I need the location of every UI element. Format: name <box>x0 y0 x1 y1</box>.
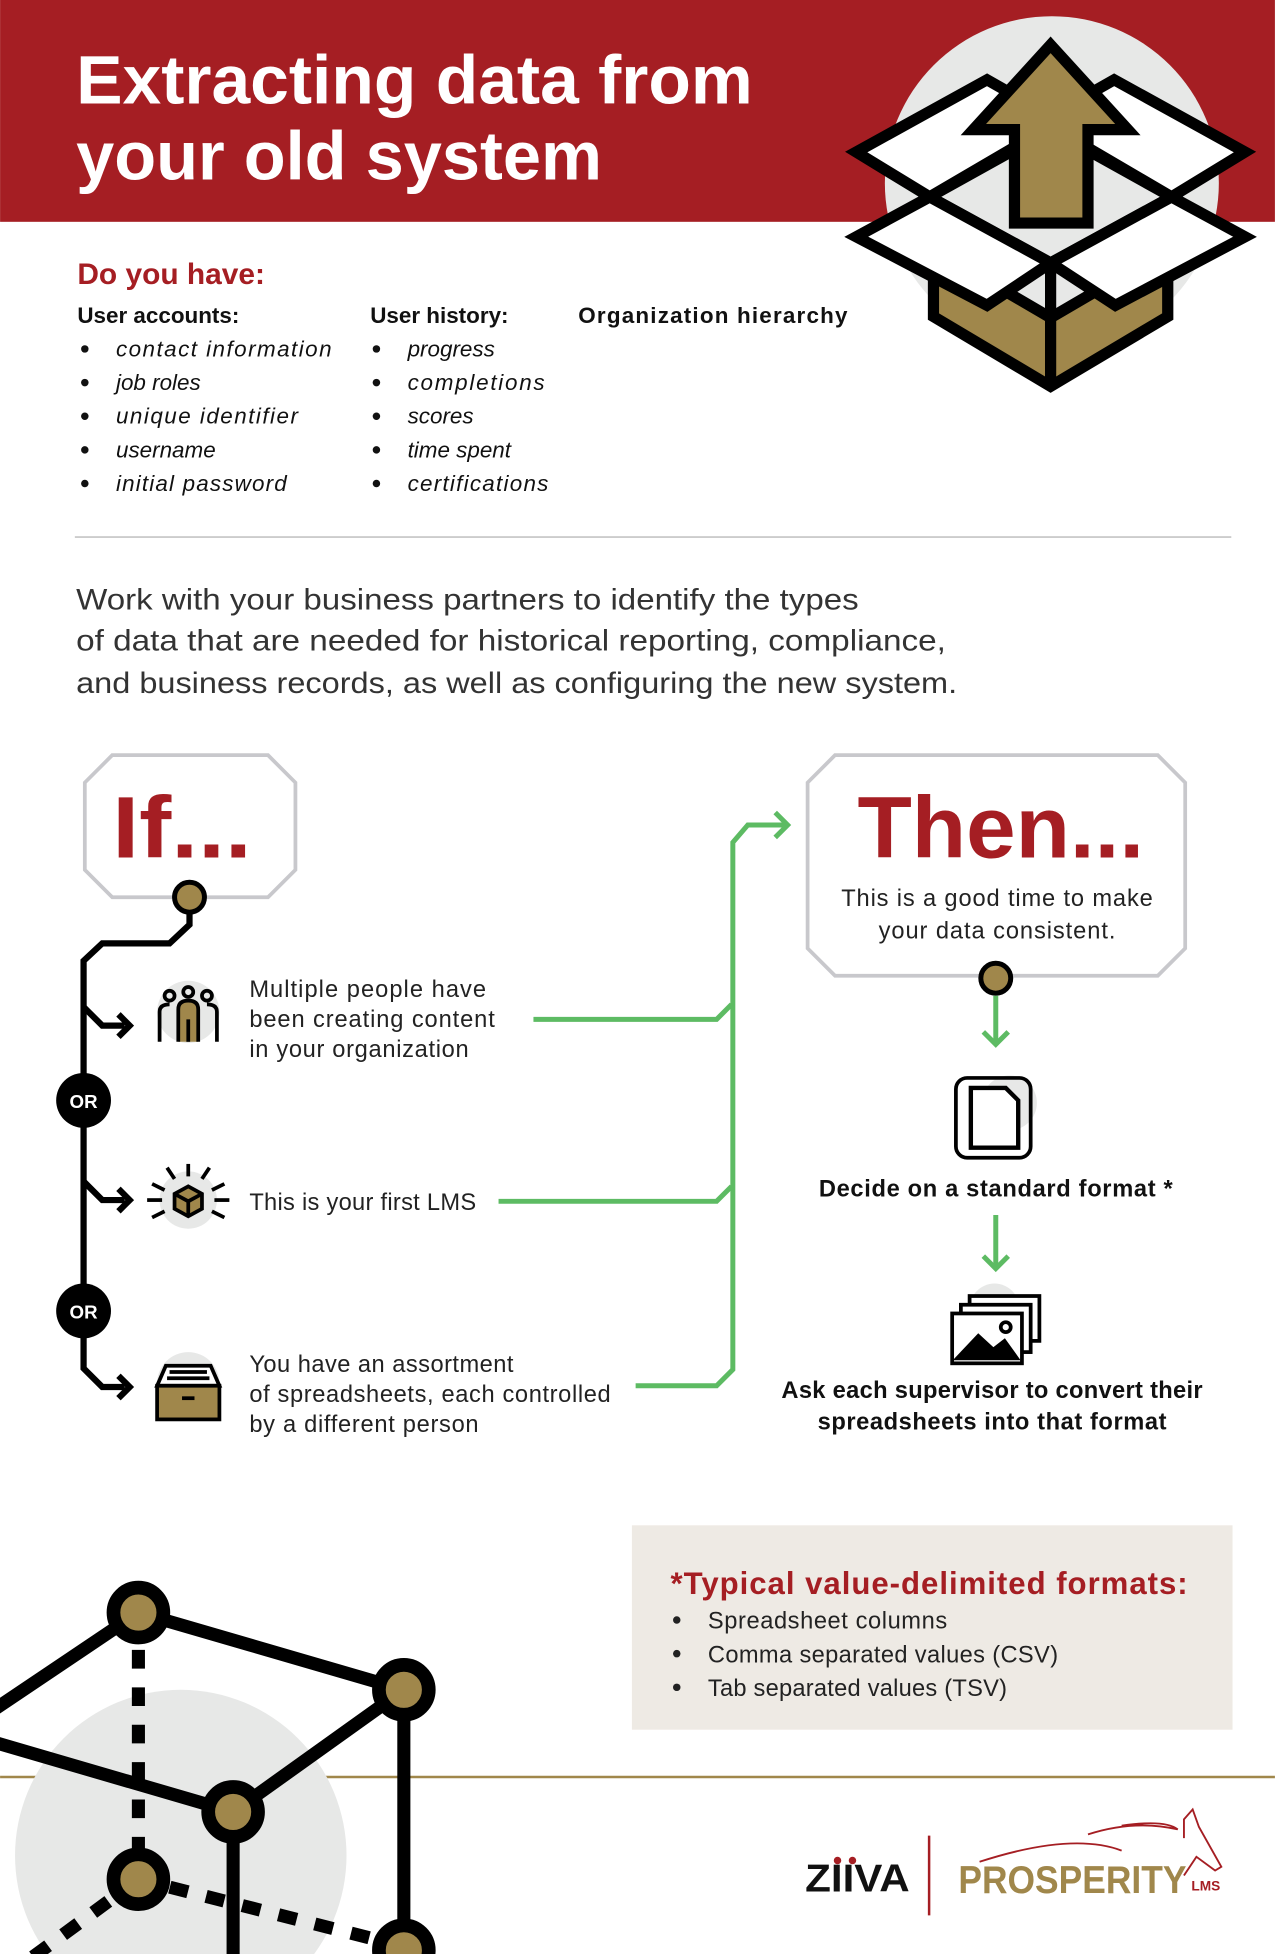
heading: Do you have: Do you have: <box>77 258 265 291</box>
panel: typical formats <box>632 1525 1233 1730</box>
text: ask supervisor <box>781 1378 1203 1435</box>
arrow: down 2 <box>983 1215 1008 1269</box>
panel: If box <box>85 755 295 897</box>
panel: If box: If... <box>112 779 252 876</box>
text: multiple people: Multiple people have <box>249 977 486 1003</box>
text: spreadsheets <box>249 1352 611 1438</box>
title: your old system <box>76 117 602 194</box>
list: user history: progress <box>407 336 495 361</box>
icon: images <box>952 1284 1039 1363</box>
icon: new box burst <box>147 1164 229 1229</box>
arrow: down 1 <box>983 996 1008 1044</box>
flow line: if branches <box>84 913 190 1398</box>
green connector lines <box>499 813 788 1386</box>
text: decide on format: Decide on a standard format * <box>819 1176 1174 1202</box>
panel: Then box: This is a good time to make <box>841 886 1153 912</box>
text: ask supervisor: Ask each supervisor to convert their <box>781 1378 1203 1404</box>
text: ask supervisor: spreadsheets into that format <box>818 1409 1167 1435</box>
OR badge 2 <box>56 1284 111 1338</box>
logo: prosperity lms: LMS <box>1191 1878 1220 1893</box>
list: user history: time spent <box>408 437 512 462</box>
intro paragraph <box>76 583 957 700</box>
list: user history: completions <box>408 370 545 395</box>
OR badge 1 <box>56 1073 111 1128</box>
list: user history: scores <box>408 404 474 429</box>
list: user accounts: initial password <box>116 471 288 496</box>
intro paragraph: of data that are needed for historical reporting, compliance, <box>76 625 946 658</box>
panel: Then box <box>808 755 1185 976</box>
list: user accounts: unique identifier <box>116 404 299 429</box>
node: then connector <box>981 963 1011 993</box>
text: multiple people: been creating content <box>249 1007 495 1033</box>
text: first LMS: This is your first LMS <box>249 1190 476 1216</box>
logo: prosperity lms <box>958 1809 1221 1902</box>
title: Extracting data from <box>76 41 753 118</box>
list: user history: certifications <box>408 471 548 496</box>
panel: Then box: Then... <box>857 779 1144 876</box>
icon: people <box>157 981 219 1043</box>
icon: drawer <box>157 1352 219 1419</box>
title <box>76 41 753 194</box>
OR badge 2: OR <box>70 1301 98 1322</box>
list: organization hierarchy: Organization hierarchy <box>578 303 848 328</box>
list: user accounts: username <box>116 437 216 462</box>
panel: typical formats: Spreadsheet columns <box>708 1609 947 1635</box>
intro paragraph: Work with your business partners to identify the types <box>76 583 859 616</box>
text: multiple people <box>249 977 495 1063</box>
OR badge 1: OR <box>70 1091 98 1112</box>
text: spreadsheets: by a different person <box>249 1412 479 1438</box>
list: user history: User history: <box>370 303 509 328</box>
text: spreadsheets: You have an assortment <box>249 1352 514 1378</box>
list: user accounts: User accounts: <box>77 303 239 328</box>
logo: prosperity lms: PROSPERITY <box>958 1859 1187 1902</box>
text: multiple people: in your organization <box>249 1037 469 1063</box>
panel: typical formats: *Typical value-delimited formats: <box>671 1566 1188 1601</box>
list: user accounts: contact information <box>116 336 332 361</box>
panel: typical formats: Comma separated values (CSV) <box>708 1642 1058 1668</box>
header band <box>0 0 1275 222</box>
intro paragraph: and business records, as well as configuring the new system. <box>76 667 957 700</box>
text: spreadsheets: of spreadsheets, each controlled <box>249 1382 611 1408</box>
icon: open box with up arrow <box>856 16 1245 386</box>
list: user accounts: job roles <box>113 370 201 395</box>
panel: typical formats: Tab separated values (TSV) <box>708 1676 1007 1702</box>
node: if connector <box>175 882 204 912</box>
panel: Then box: your data consistent. <box>879 918 1115 944</box>
logo: ziiva: ZIIVA <box>805 1858 910 1901</box>
decorative cube network <box>0 1588 429 1954</box>
list: user accounts <box>77 303 332 496</box>
list: user history <box>370 303 548 496</box>
icon: document <box>956 1075 1037 1158</box>
